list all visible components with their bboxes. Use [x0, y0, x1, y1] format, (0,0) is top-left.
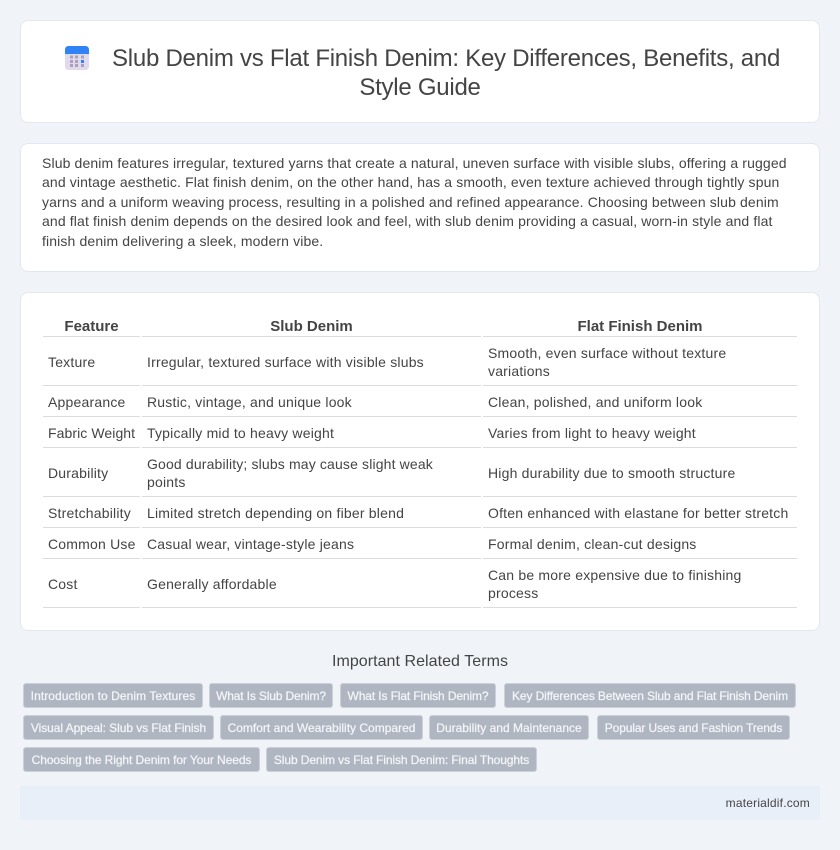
row: cost: process [488, 585, 538, 601]
row: stretchability: Often enhanced with elastane for better stretch [488, 505, 788, 521]
table header: feature: Feature [64, 318, 119, 335]
row: appearance: Clean, polished, and uniform look [488, 394, 702, 410]
row: stretchability [48, 505, 788, 521]
chip: Popular Uses and Fashion Trends [605, 721, 782, 735]
footer [20, 786, 820, 820]
chip [597, 715, 790, 740]
row: appearance: Appearance [48, 394, 126, 410]
chip [23, 683, 203, 708]
row: common use: Common Use [48, 536, 136, 552]
chip: Visual Appeal: Slub vs Flat Finish [31, 721, 206, 735]
row: texture: Texture [48, 354, 95, 370]
chip [220, 715, 423, 740]
footer site name: materialdif.com [726, 796, 810, 810]
panel: comparison table [20, 292, 820, 631]
title [112, 45, 780, 101]
row: cost [48, 567, 742, 601]
row: texture: variations [488, 363, 550, 379]
row: common use: Formal denim, clean-cut designs [488, 536, 697, 552]
chip: What Is Slub Denim? [216, 689, 326, 703]
table header: flat finish denim: Flat Finish Denim [577, 318, 702, 335]
table header: slub denim: Slub Denim [270, 318, 353, 335]
row: durability: points [147, 474, 186, 490]
row: fabric weight: Varies from light to heavy weight [488, 425, 696, 441]
row: common use: Casual wear, vintage-style jeans [147, 536, 354, 552]
chip: What Is Flat Finish Denim? [348, 689, 488, 703]
related terms heading: Important Related Terms [332, 653, 508, 670]
intro text: and vintage aesthetic. Flat finish denim, on the other hand, has a smooth, even texture achieved through tightly spun [42, 174, 779, 190]
title: Style Guide [359, 74, 481, 101]
chip [23, 747, 260, 772]
intro text: and flat finish denim depends on the desired look and feel, with slub denim providing a casual, worn-in style and flat [42, 213, 773, 229]
row: texture [48, 345, 726, 379]
row: durability: Good durability; slubs may cause slight weak [147, 456, 433, 472]
row: fabric weight: Fabric Weight [48, 425, 135, 441]
related terms chips [23, 683, 796, 772]
chip [429, 715, 589, 740]
comparison table [43, 318, 797, 608]
row: common use [48, 536, 697, 552]
chip: Durability and Maintenance [436, 721, 582, 735]
chip [209, 683, 333, 708]
row: appearance [48, 394, 702, 410]
row: stretchability: Stretchability [48, 505, 131, 521]
row: cost: Cost [48, 576, 78, 592]
intro text: finish denim delivering a sleek, modern vibe. [42, 233, 323, 249]
row: texture: Irregular, textured surface with visible slubs [147, 354, 424, 370]
row: texture: Smooth, even surface without texture [488, 345, 726, 361]
panel: intro [20, 143, 820, 272]
chip [23, 715, 214, 740]
row: durability: Durability [48, 465, 108, 481]
row: cost: Can be more expensive due to finishing [488, 567, 742, 583]
row: durability [48, 456, 735, 490]
row: cost: Generally affordable [147, 576, 277, 592]
header panel [20, 20, 820, 123]
chip: Introduction to Denim Textures [31, 689, 195, 703]
chip: Comfort and Wearability Compared [228, 721, 415, 735]
intro text [42, 155, 787, 249]
row: fabric weight [48, 425, 696, 441]
chip [340, 683, 496, 708]
row: durability: High durability due to smooth structure [488, 465, 735, 481]
chip [504, 683, 796, 708]
intro text: yarns and a uniform weaving process, resulting in a polished and refined appearance. Choosing between slub denim [42, 194, 779, 210]
icon: calendar [65, 46, 89, 70]
row: appearance: Rustic, vintage, and unique look [147, 394, 352, 410]
chip: Choosing the Right Denim for Your Needs [32, 753, 251, 767]
row: fabric weight: Typically mid to heavy weight [147, 425, 334, 441]
title: Slub Denim vs Flat Finish Denim: Key Differences, Benefits, and [112, 45, 780, 72]
chip: Key Differences Between Slub and Flat Finish Denim [512, 689, 788, 703]
chip: Slub Denim vs Flat Finish Denim: Final Thoughts [274, 753, 529, 767]
intro text: Slub denim features irregular, textured yarns that create a natural, uneven surface with visible slubs, offering a rugged [42, 155, 787, 171]
chip [266, 747, 537, 772]
row: stretchability: Limited stretch depending on fiber blend [147, 505, 404, 521]
